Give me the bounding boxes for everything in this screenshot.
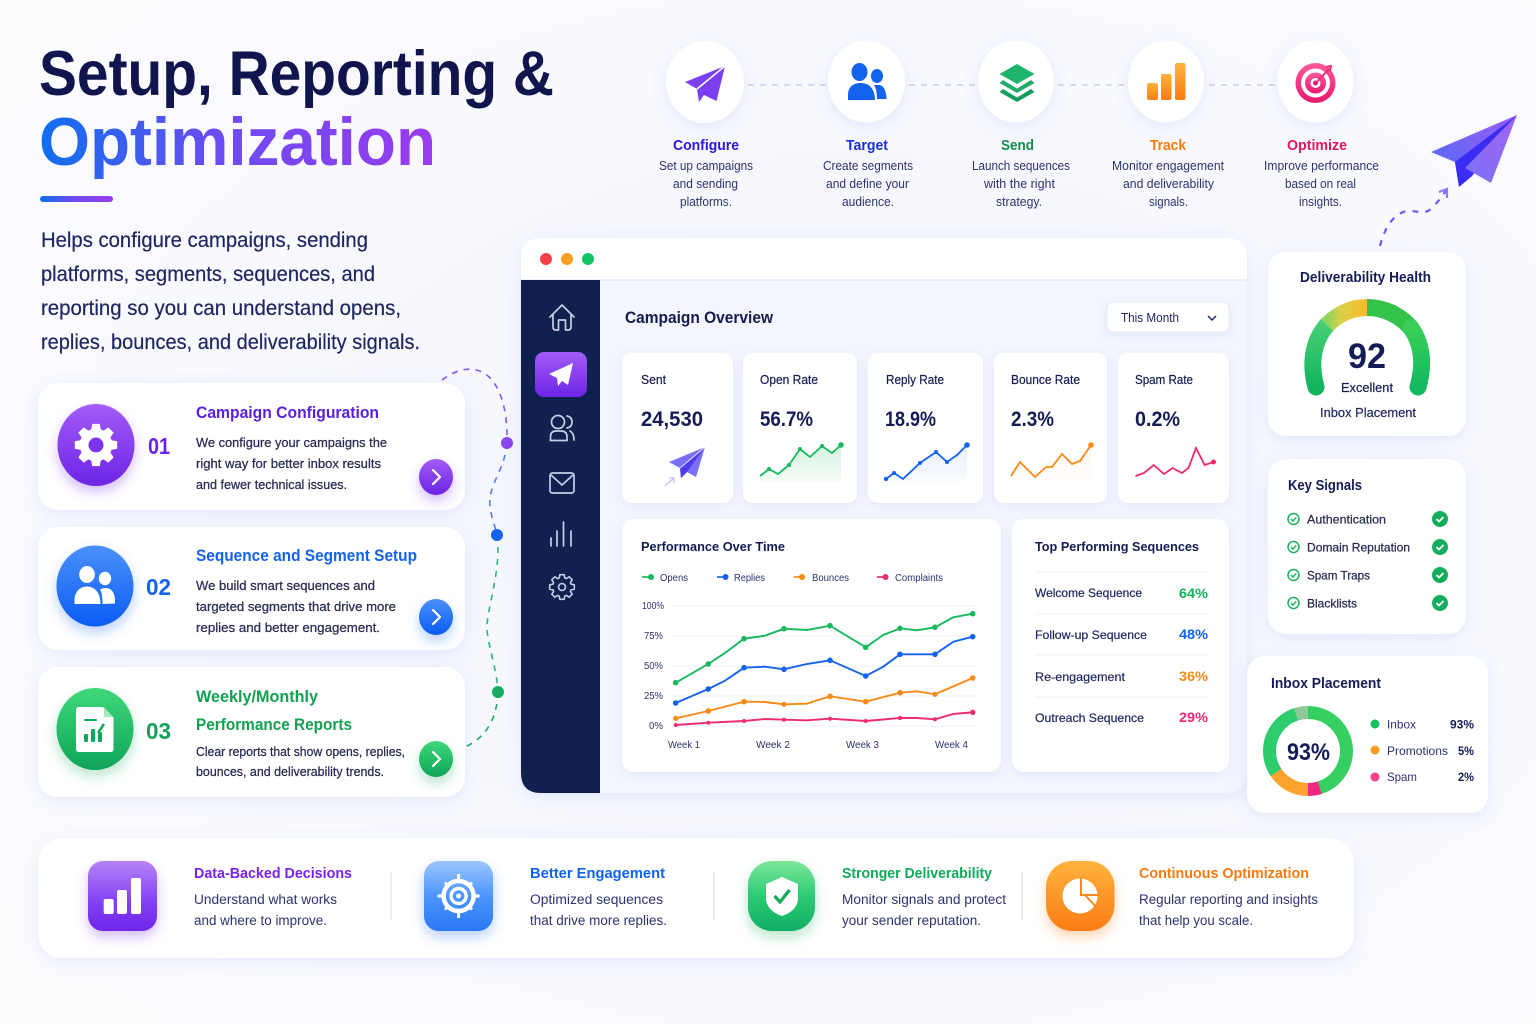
- kpi card: reply rate: 18.9%: [885, 408, 936, 431]
- intro paragraph: platforms, segments, sequences, and: [41, 263, 375, 286]
- chart axes: 75%: [644, 631, 663, 642]
- arrow button: [419, 599, 453, 635]
- arrow button: [419, 741, 453, 777]
- kpi card: open rate: Open Rate: [760, 373, 818, 387]
- sequence rows: Welcome Sequence: [1035, 586, 1142, 600]
- signal: authentication: [1288, 511, 1448, 527]
- panel heading: Deliverability Health: [1300, 270, 1431, 286]
- label: Target: [846, 137, 888, 154]
- gauge caption: Inbox Placement: [1320, 406, 1417, 420]
- kpi card: reply rate: Reply Rate: [886, 373, 944, 387]
- intro paragraph: reporting so you can understand opens,: [41, 297, 401, 320]
- kpi card: sent: 24,530: [641, 408, 703, 431]
- signal: domain reputation: Domain Reputation: [1307, 540, 1410, 554]
- icon: home: [550, 305, 574, 330]
- chart legend: Complaints: [895, 573, 943, 584]
- kpi card: bounce rate: [994, 353, 1107, 503]
- gauge label: Excellent: [1341, 380, 1393, 395]
- description: [1264, 159, 1379, 209]
- title: [39, 39, 554, 180]
- panel: sequence and segment setup: [38, 527, 465, 650]
- label: Send: [1001, 137, 1034, 154]
- icon: people: [56, 546, 134, 626]
- sequence rows: Follow-up Sequence: [1035, 628, 1147, 642]
- chart axes: [642, 601, 976, 751]
- body text: We configure your campaigns the: [196, 435, 387, 450]
- benefit: data-backed decisions: and where to improve.: [194, 913, 327, 928]
- benefit: better engagement: Better Engagement: [530, 865, 665, 882]
- heading: Weekly/Monthly: [196, 687, 319, 706]
- body text: [196, 744, 405, 779]
- panel: key signals: [1268, 459, 1466, 634]
- sparkline: spam rate: [1136, 448, 1216, 476]
- title: Optimization: [39, 104, 436, 180]
- step: send: [972, 40, 1070, 209]
- sequence rows: Outreach Sequence: [1035, 711, 1144, 725]
- gauge: [1313, 308, 1422, 387]
- heading: Performance Reports: [196, 715, 352, 734]
- panel: performance over time: [622, 519, 1001, 772]
- dropdown: this month: This Month: [1121, 311, 1179, 325]
- description: Create segments: [823, 159, 913, 173]
- intro paragraph: Helps configure campaigns, sending: [41, 229, 368, 252]
- icon: mail: [550, 473, 574, 493]
- body text: We build smart sequences and: [196, 578, 375, 593]
- sequence rows: [1035, 586, 1147, 725]
- description: [972, 159, 1070, 209]
- gauge score: 92: [1348, 337, 1386, 376]
- description: [823, 159, 913, 209]
- icon: report document: [56, 688, 134, 770]
- chart title: Performance Over Time: [641, 539, 785, 554]
- signal: blacklists: [1288, 595, 1448, 611]
- panel: inbox placement: [1247, 656, 1488, 813]
- chart axes: 25%: [644, 691, 663, 702]
- heading: Campaign Configuration: [196, 403, 379, 422]
- icon: shield: [748, 861, 815, 931]
- kpi card: open rate: [743, 353, 857, 503]
- description: and define your: [826, 177, 909, 191]
- icon: pie chart: [1046, 861, 1114, 931]
- step: target: [823, 40, 913, 209]
- intro paragraph: replies, bounces, and deliverability signals.: [41, 331, 420, 354]
- dropdown: this month: [1107, 302, 1229, 332]
- signal: spam traps: [1288, 567, 1448, 583]
- icon: people: [828, 40, 905, 122]
- panel: weekly monthly performance reports: [38, 667, 465, 797]
- label: Configure: [673, 137, 739, 154]
- benefit: data-backed decisions: Understand what works: [194, 892, 337, 907]
- icon: small plane: [665, 447, 705, 486]
- heading: [196, 687, 352, 734]
- signal: spam traps: Spam Traps: [1307, 568, 1370, 582]
- kpi card: bounce rate: 2.3%: [1011, 408, 1054, 431]
- benefit: stronger deliverability: [748, 861, 1006, 931]
- description: and sending: [673, 177, 738, 191]
- chart axes: Week 3: [846, 740, 879, 751]
- icon: users: [550, 416, 574, 440]
- body text: targeted segments that drive more: [196, 599, 396, 614]
- label: Track: [1150, 137, 1187, 154]
- donut chart: [1270, 712, 1346, 790]
- body text: right way for better inbox results: [196, 456, 381, 471]
- step: optimize: [1264, 40, 1379, 209]
- donut legend: Inbox: [1387, 718, 1416, 732]
- description: with the right: [983, 177, 1056, 191]
- number 03: 03: [146, 718, 171, 744]
- step: configure: [659, 41, 753, 209]
- line series: complaints: [674, 710, 975, 727]
- kpi card: spam rate: 0.2%: [1135, 408, 1180, 431]
- arrow button: [419, 459, 453, 495]
- panel heading: Top Performing Sequences: [1035, 539, 1199, 554]
- title: Setup, Reporting &: [39, 39, 554, 109]
- donut value: 93%: [1287, 739, 1330, 766]
- panel: dashboard window: [521, 238, 1247, 793]
- benefit: stronger deliverability: your sender reputation.: [842, 913, 981, 928]
- icon: paper plane: [666, 41, 744, 123]
- step: track: [1112, 40, 1225, 209]
- sparkline: bounce rate: [1011, 442, 1094, 481]
- panel: deliverability health: [1268, 252, 1466, 436]
- number 01: 01: [148, 433, 170, 459]
- panel: campaign configuration: [38, 383, 465, 510]
- sequence values: 36%: [1179, 669, 1208, 684]
- benefit: continuous optimization: Continuous Optimization: [1139, 865, 1309, 882]
- benefit: continuous optimization: [1046, 861, 1318, 931]
- sequence values: [1179, 586, 1208, 725]
- line series: opens: [673, 611, 976, 686]
- panel: top performing sequences: [1012, 519, 1229, 772]
- chart legend: [642, 573, 943, 584]
- icon: active send: [535, 352, 587, 397]
- sparkline: open rate: [760, 442, 844, 481]
- panel: benefits bar: [38, 838, 1354, 958]
- benefit: data-backed decisions: Data-Backed Decisions: [194, 865, 352, 882]
- panel heading: Inbox Placement: [1271, 676, 1381, 692]
- description: strategy.: [996, 195, 1042, 209]
- benefit: data-backed decisions: [88, 861, 352, 931]
- icon: settings: [550, 575, 574, 599]
- chart axes: Week 4: [935, 740, 968, 751]
- chart legend: Replies: [734, 573, 765, 584]
- connector path between cards: [442, 369, 513, 747]
- kpi card: spam rate: [1118, 353, 1229, 503]
- benefit: stronger deliverability: Stronger Deliverability: [842, 865, 993, 882]
- benefit: better engagement: Optimized sequences: [530, 892, 663, 907]
- signal: authentication: Authentication: [1307, 512, 1386, 526]
- chart axes: Week 2: [756, 740, 790, 751]
- donut legend: Spam: [1387, 770, 1417, 784]
- chart axes: Week 1: [668, 740, 700, 751]
- icon: bar chart: [1128, 40, 1204, 122]
- description: and deliverability: [1123, 177, 1215, 191]
- signal: domain reputation: [1288, 539, 1448, 555]
- line series: bounces: [673, 675, 976, 721]
- sequence rows: Re-engagement: [1035, 670, 1126, 684]
- description: [659, 159, 753, 209]
- body text: and fewer technical issues.: [196, 477, 347, 492]
- icon: bars: [551, 522, 571, 546]
- kpi card: open rate: 56.7%: [760, 408, 813, 431]
- kpi card: sent: Sent: [641, 373, 667, 387]
- description: Set up campaigns: [659, 159, 753, 173]
- chart axes: 100%: [642, 601, 664, 612]
- benefit: better engagement: that drive more replies.: [530, 913, 667, 928]
- description: signals.: [1149, 195, 1188, 209]
- description: Monitor engagement: [1112, 159, 1225, 173]
- benefit: stronger deliverability: Monitor signals and protect: [842, 892, 1006, 907]
- body text: bounces, and deliverability trends.: [196, 764, 384, 779]
- icon: layers: [978, 40, 1054, 122]
- process connector dashes: [748, 84, 1276, 86]
- arrow: dashed curve to plane: [1380, 189, 1447, 246]
- line series: replies: [673, 634, 976, 706]
- icon: target: [1278, 40, 1354, 122]
- donut legend: 93%: [1450, 718, 1474, 732]
- heading: campaign overview: Campaign Overview: [625, 308, 774, 327]
- label: Optimize: [1287, 137, 1347, 154]
- description: [1112, 159, 1225, 209]
- panel heading: Key Signals: [1288, 478, 1362, 494]
- sidebar: [521, 280, 600, 793]
- body text: [196, 435, 387, 492]
- window title bar: [521, 238, 1247, 280]
- number 02: 02: [146, 574, 171, 600]
- sequence values: 48%: [1179, 627, 1208, 642]
- description: Improve performance: [1264, 159, 1379, 173]
- description: insights.: [1299, 195, 1342, 209]
- description: platforms.: [680, 195, 732, 209]
- donut legend: 2%: [1458, 770, 1474, 784]
- sequence values: 29%: [1179, 710, 1208, 725]
- chart legend: Opens: [660, 573, 688, 584]
- title underline: [40, 196, 113, 202]
- icon: large paper plane: [1431, 115, 1517, 187]
- benefit: continuous optimization: Regular reporting and insights: [1139, 892, 1318, 907]
- donut legend: Promotions: [1387, 744, 1448, 758]
- sequence values: 64%: [1179, 586, 1208, 601]
- donut legend: 5%: [1458, 744, 1474, 758]
- heading: Sequence and Segment Setup: [196, 546, 417, 565]
- description: Launch sequences: [972, 159, 1070, 173]
- kpi card: bounce rate: Bounce Rate: [1011, 373, 1080, 387]
- icon: bars: [88, 861, 157, 931]
- donut legend: [1370, 718, 1474, 784]
- body text: replies and better engagement.: [196, 620, 380, 635]
- sparkline: reply rate: [884, 442, 970, 481]
- chart legend: Bounces: [812, 573, 849, 584]
- chart axes: 0%: [649, 721, 663, 732]
- icon: gear: [58, 404, 134, 486]
- description: audience.: [842, 195, 894, 209]
- body text: Clear reports that show opens, replies,: [196, 744, 405, 759]
- body text: [196, 578, 396, 635]
- benefit: continuous optimization: that help you scale.: [1139, 913, 1253, 928]
- description: based on real: [1285, 177, 1356, 191]
- kpi card: reply rate: [868, 353, 983, 503]
- chart axes: 50%: [644, 661, 663, 672]
- kpi card: spam rate: Spam Rate: [1135, 373, 1193, 387]
- signal: blacklists: Blacklists: [1307, 596, 1357, 610]
- kpi card: sent: [622, 353, 733, 503]
- icon: wheel target: [424, 861, 493, 931]
- intro paragraph: [41, 229, 420, 354]
- benefit: better engagement: [424, 861, 667, 931]
